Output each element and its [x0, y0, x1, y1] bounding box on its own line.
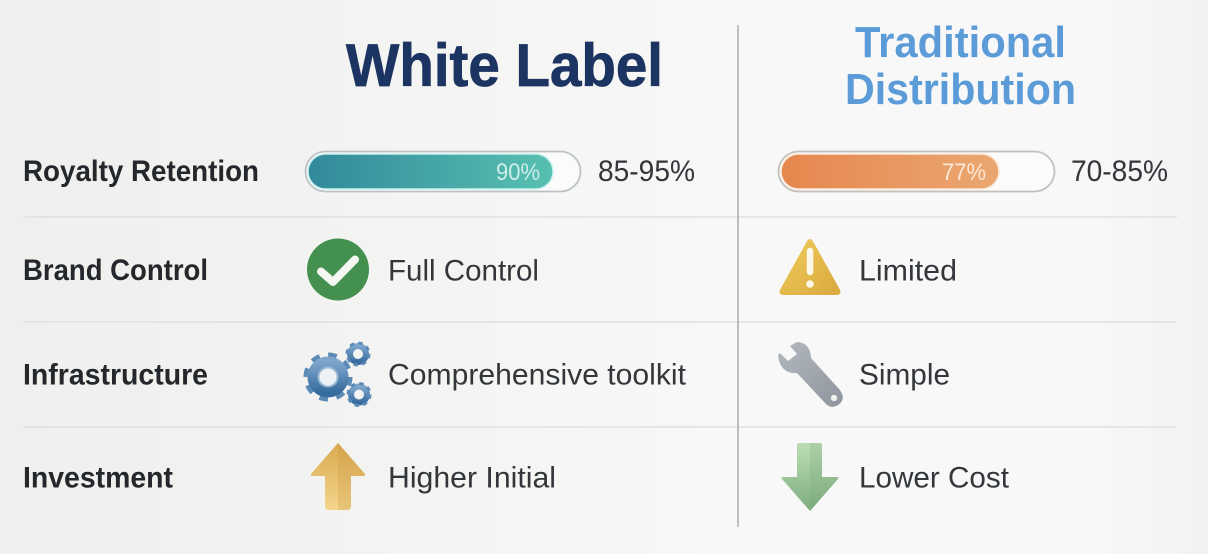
row label: Royalty Retention: Royalty Retention: [23, 155, 259, 188]
heading: Traditional Distribution: Distribution: [845, 65, 1076, 114]
progress bar: White Label 90%: 90%: [496, 159, 540, 186]
progress bar: White Label 90%: [306, 152, 580, 192]
value: Lower Cost: Lower Cost: [859, 462, 1010, 494]
heading: White Label: White Label: [346, 32, 663, 99]
value: Higher Initial: Higher Initial: [388, 462, 556, 494]
heading: Traditional Distribution: [845, 18, 1076, 114]
icon: green check: [307, 238, 369, 300]
value: 85-95%: 85-95%: [598, 155, 695, 188]
row label: Infrastructure: Infrastructure: [23, 358, 208, 392]
icon: warning triangle: [780, 239, 840, 295]
value: Simple: Simple: [859, 358, 950, 392]
row label: Brand Control: Brand Control: [23, 254, 208, 287]
icon: gears: [306, 343, 370, 406]
progress bar: Traditional 77%: [778, 152, 1054, 192]
value: 70-85%: 70-85%: [1071, 155, 1168, 188]
row label: Investment: Investment: [23, 462, 173, 494]
icon: down arrow: [782, 443, 838, 511]
icon: wrench: [778, 342, 843, 407]
heading: Traditional Distribution: Traditional: [855, 18, 1066, 67]
icon: up arrow: [311, 443, 365, 510]
value: Comprehensive toolkit: Comprehensive toolkit: [388, 358, 687, 392]
progress bar: Traditional 77%: 77%: [942, 159, 986, 186]
value: Full Control: Full Control: [388, 254, 539, 288]
value: Limited: Limited: [859, 254, 957, 288]
